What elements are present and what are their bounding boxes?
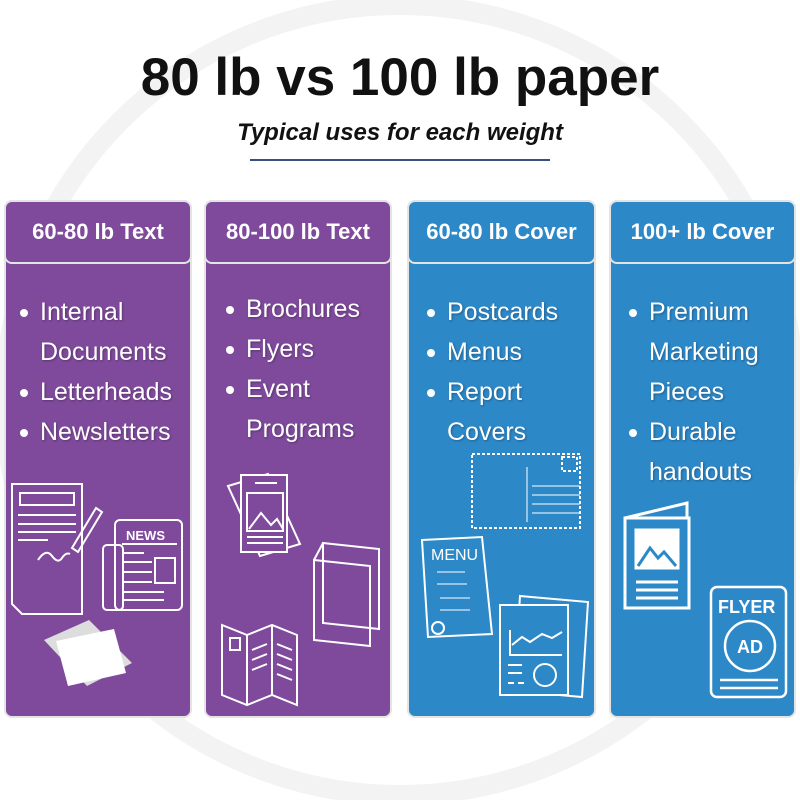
header: 60-80 lb Cover (407, 200, 596, 264)
list: heavier text uses: Event (246, 375, 310, 403)
icon: postcard (472, 454, 580, 528)
header: 80-100 lb Text (204, 200, 392, 264)
icon: newspaper (103, 520, 182, 610)
header: 100+ lb Cover (609, 200, 796, 264)
icon: menu (422, 537, 492, 637)
icon: flyers (228, 474, 300, 556)
panel: 60-80 lb Cover (407, 200, 596, 718)
list: cover uses: Covers (447, 418, 526, 446)
icon: bifold brochure (314, 543, 379, 646)
icon: menu: MENU (431, 547, 478, 564)
list: premium uses: Durable (649, 418, 737, 446)
list: premium uses: Pieces (649, 378, 724, 406)
header: 100+ lb Cover: 100+ lb Cover (631, 219, 774, 244)
icon: flyer ad: AD (737, 637, 763, 657)
subtitle: Typical uses for each weight (237, 119, 563, 146)
icon: folded brochure (625, 503, 689, 608)
list: premium uses (629, 298, 760, 486)
list: premium uses: Premium (649, 298, 749, 326)
icon: letter with pen (12, 484, 102, 614)
list: heavier text uses: Flyers (246, 335, 314, 363)
list: premium uses: handouts (649, 458, 752, 486)
list: text uses: Internal (40, 298, 123, 326)
list: text uses: Letterheads (40, 378, 172, 406)
list: cover uses: Report (447, 378, 522, 406)
icon: flyer ad (711, 587, 786, 697)
list: text uses: Newsletters (40, 418, 171, 446)
panel: 80-100 lb Text (204, 200, 392, 718)
list: cover uses: Postcards (447, 298, 558, 326)
panel: 60-80 lb Text (4, 200, 192, 718)
panel: 100+ lb Cover (609, 200, 796, 718)
list: cover uses: Menus (447, 338, 522, 366)
list: cover uses (427, 298, 559, 446)
icon: paper sheets (44, 620, 132, 686)
subtitle underline (250, 159, 550, 161)
icon: trifold brochure (222, 625, 297, 705)
list: heavier text uses: Programs (246, 415, 354, 443)
list: heavier text uses (226, 295, 361, 444)
list: text uses (20, 298, 173, 446)
icon: report (500, 596, 588, 697)
header: 60-80 lb Text (4, 200, 192, 264)
header: 60-80 lb Text: 60-80 lb Text (32, 219, 164, 244)
icon: flyer ad: FLYER (718, 597, 775, 617)
title: 80 lb vs 100 lb paper (141, 48, 659, 107)
header: 80-100 lb Text: 80-100 lb Text (226, 219, 370, 244)
header: 60-80 lb Cover: 60-80 lb Cover (426, 219, 577, 244)
list: premium uses: Marketing (649, 338, 759, 366)
list: text uses: Documents (40, 338, 166, 366)
icon: newspaper: NEWS (126, 528, 165, 543)
list: heavier text uses: Brochures (246, 295, 360, 323)
